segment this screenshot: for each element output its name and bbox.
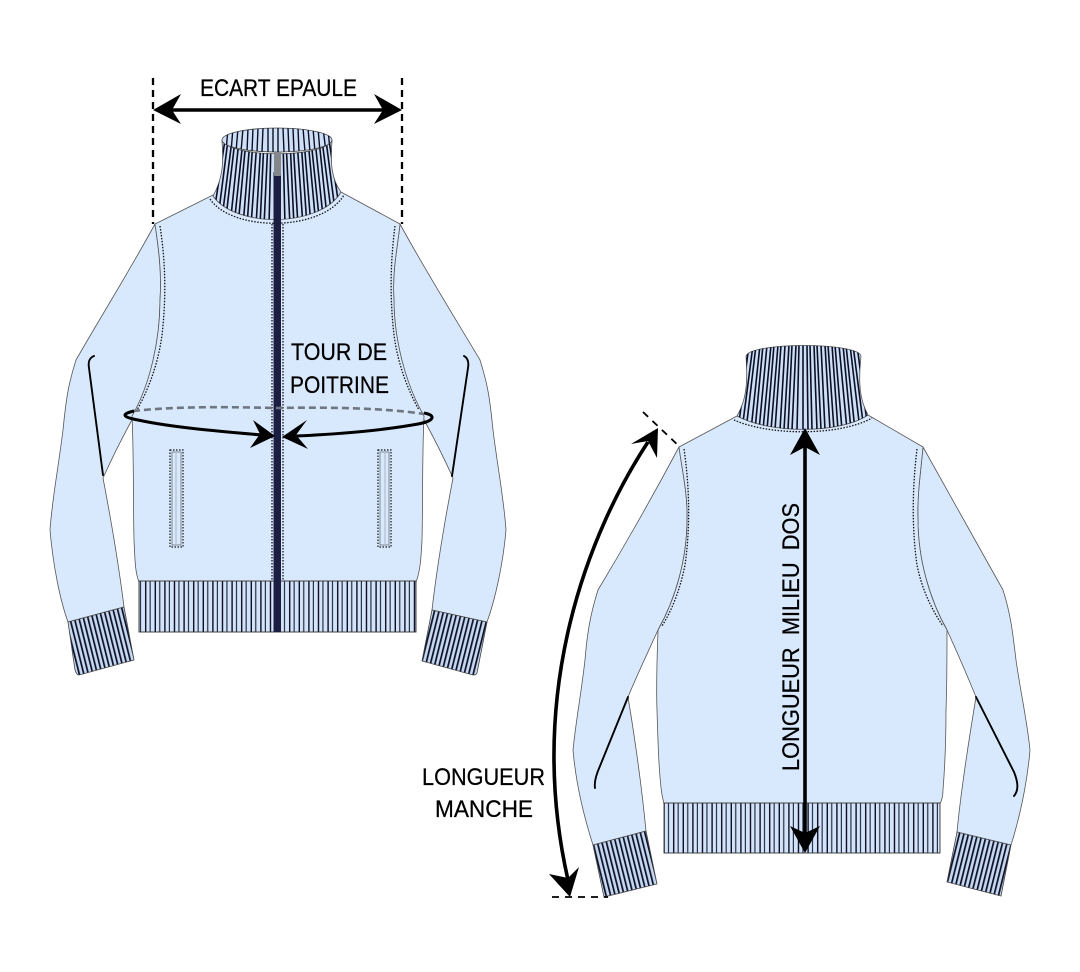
sleeve guide lines: [552, 412, 680, 897]
shoulder double arrow: [153, 94, 402, 124]
label: longueur manche: [422, 764, 545, 823]
chest right arrow: [282, 413, 432, 449]
chest label: [290, 339, 389, 399]
back length measure: [778, 428, 820, 853]
front sleeve fold left: [89, 356, 103, 475]
front zipper: [274, 172, 281, 632]
sleeve length measure: [422, 412, 680, 897]
label: longueur manche: MANCHE: [435, 796, 533, 823]
front right cuff: [422, 610, 487, 675]
chest label: POITRINE: [290, 372, 389, 399]
left pocket: [170, 450, 183, 547]
back sleeve fold left: [595, 697, 628, 788]
front left sleeve: [50, 224, 161, 622]
chest measure: [125, 339, 432, 449]
label: longueur milieu dos: LONGUEUR MILIEU DOS: [778, 503, 805, 771]
front hem rib: [139, 581, 416, 632]
back right sleeve: [918, 447, 1030, 845]
shoulder guide lines: [153, 78, 402, 224]
front jacket: [50, 128, 506, 675]
front neck stitching: [210, 195, 344, 223]
front sleeve fold right: [452, 356, 468, 476]
sleeve curved arrow: [549, 428, 658, 897]
back armhole stitching: [662, 449, 943, 626]
back collar: [737, 345, 868, 430]
back neck stitching: [734, 418, 872, 432]
chest label: TOUR DE: [291, 339, 387, 366]
chest left arrow: [125, 411, 275, 448]
back left cuff: [593, 831, 657, 897]
back sleeve fold right: [976, 697, 1017, 796]
back body: [657, 415, 947, 804]
front placket stitching: [272, 224, 283, 581]
front left cuff: [68, 607, 134, 675]
front armhole stitching: [137, 226, 419, 410]
right pocket: [378, 450, 391, 547]
back right cuff: [947, 832, 1011, 896]
back jacket: [573, 345, 1030, 897]
label: longueur manche: LONGUEUR: [422, 764, 545, 791]
chest dashed back line: [133, 407, 424, 414]
front collar: [212, 128, 342, 226]
back length double arrow: [790, 428, 820, 853]
shoulder width measure: [153, 75, 402, 224]
back left sleeve: [573, 447, 687, 845]
label: ecart epaule: ECART EPAULE: [200, 75, 357, 102]
front body: [132, 192, 424, 582]
zipper pull: [274, 152, 281, 176]
front right sleeve: [394, 224, 506, 622]
back hem rib: [664, 803, 940, 853]
